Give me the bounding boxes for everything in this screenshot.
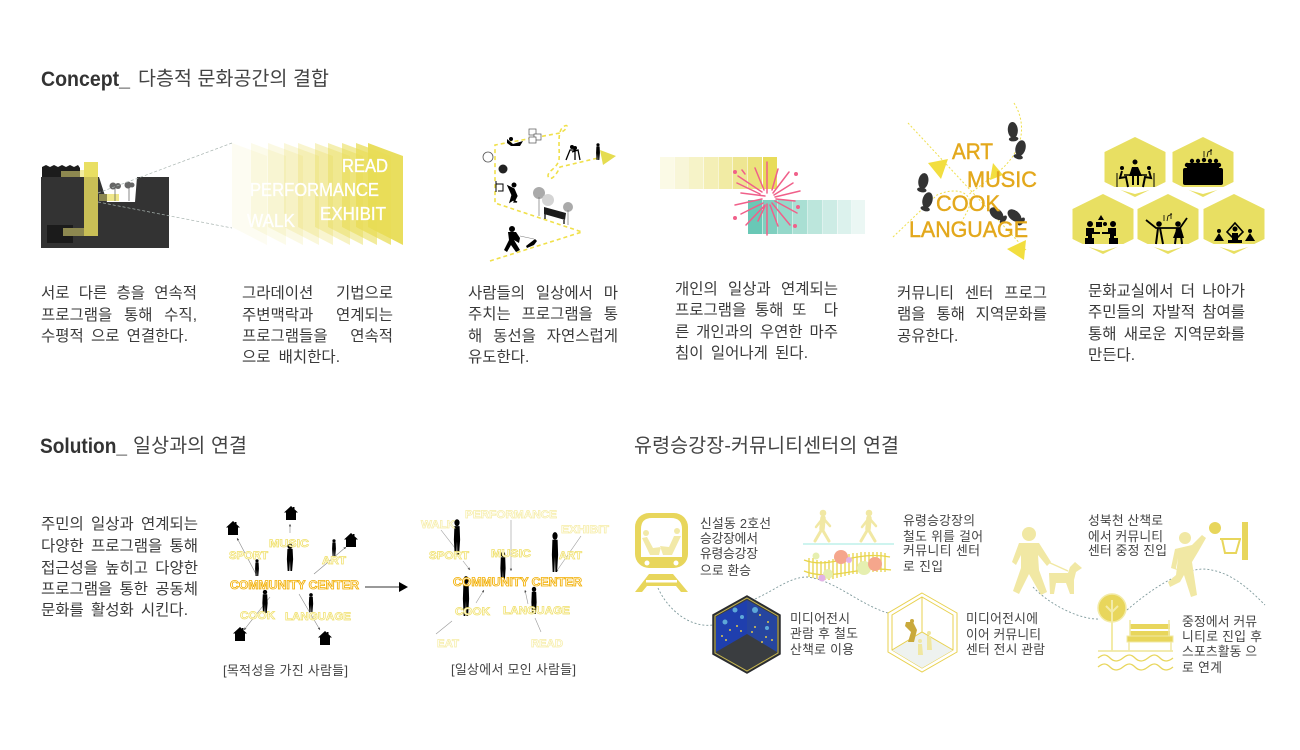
gradient panels: programs: PERFORMANCE	[250, 179, 379, 200]
text: solution: 다양한 프로그램을 통해	[41, 537, 198, 555]
text: concept 4	[675, 280, 838, 362]
gradient panels: programs: EXHIBIT	[320, 203, 386, 224]
text: concept 4: 른 개인과의 우연한 마주	[675, 323, 838, 341]
text: station	[700, 516, 771, 578]
text: solution: 문화를 활성화 시킨다.	[41, 601, 188, 619]
diagram: everyday people: EAT	[437, 638, 459, 650]
icon: sculpture hexagon	[888, 593, 957, 672]
heading: solution	[40, 435, 247, 458]
diagram: everyday people: EXHIBIT	[561, 524, 609, 536]
text: solution: 접근성을 높히고 다양한	[41, 559, 198, 577]
text: concept 1: 프로그램을 통해 수직,	[41, 306, 197, 324]
diagram: purposeful people: COMMUNITY CENTER	[230, 580, 360, 592]
text: solution: 주민의 일상과 연계되는	[41, 515, 198, 533]
text: bridge: 철도 위를 걸어	[903, 529, 983, 544]
text: concept 6: 문화교실에서 더 나아가	[1088, 282, 1245, 300]
text: concept 5	[897, 284, 1047, 345]
text: concept 6: 주민들의 자발적 참여를	[1088, 303, 1245, 321]
text: exhibition: 센터 전시 관람	[966, 642, 1045, 657]
diagram: everyday people: PERFORMANCE	[465, 509, 557, 521]
icon: table group	[1117, 160, 1154, 187]
heading: solution: 일상과의 연결	[133, 435, 247, 457]
text: media: 관람 후 철도	[790, 626, 858, 641]
diagram: everyday people	[421, 509, 609, 650]
text: bridge	[903, 513, 983, 574]
text: bridge: 커뮤니티 센터	[903, 543, 980, 558]
text: concept 3: 주치는 프로그램을 통	[468, 305, 618, 323]
diagram: purposeful people: LANGUAGE	[285, 611, 351, 623]
text: exhibition: 미디어전시에	[966, 611, 1038, 626]
diagram: everyday people: WALK	[421, 519, 455, 531]
text: concept 5: 공유한다.	[897, 327, 958, 345]
text: exhibition	[966, 611, 1045, 657]
text: concept 2: 주변맥락과 연계되는	[242, 306, 393, 324]
caption: everyday people: [일상에서 모인 사람들]	[451, 662, 576, 677]
gradient panels: programs: READ	[342, 155, 388, 176]
text: station: 신설동 2호선	[700, 516, 771, 531]
text: concept 5: 램을 통해 지역문화를	[897, 305, 1047, 323]
text: stream walk: 에서 커뮤니티	[1088, 529, 1163, 544]
gradient panels: programs	[232, 143, 403, 245]
text: media: 산책로 이용	[790, 642, 854, 657]
diagram: everyday people: LANGUAGE	[503, 605, 570, 617]
diagram: purposeful people: COOK	[240, 610, 275, 622]
text: exhibition: 이어 커뮤니티	[966, 627, 1041, 642]
text: media	[790, 611, 858, 657]
diagram: purposeful people: ART	[322, 555, 346, 567]
text: concept 2: 프로그램들을 연속적	[242, 327, 393, 345]
diagram: everyday people: COOK	[455, 606, 490, 618]
text: concept 3: 사람들의 일상에서 마	[468, 284, 618, 302]
text: concept 4: 침이 일어나게 된다.	[675, 344, 808, 362]
colour blocks with burst	[660, 157, 865, 235]
text: concept 2: 그라데이션 기법으로	[242, 284, 393, 302]
text: concept 4: 프로그램을 통해 또 다	[675, 301, 838, 319]
heading: concept: 다층적 문화공간의 결합	[138, 68, 329, 90]
text: concept 1: 서로 다른 층을 연속적	[41, 284, 197, 302]
program words with footprints: MUSIC	[967, 167, 1037, 192]
icon: walker with dog	[1012, 527, 1082, 595]
icon: choir	[1183, 158, 1223, 185]
text: solution: 프로그램을 통한 공동체	[41, 580, 198, 598]
heading: concept: Concept_	[41, 68, 130, 91]
text: concept 5: 커뮤니티 센터 프로그	[897, 284, 1047, 302]
text: concept 3	[468, 284, 618, 366]
text: concept 6: 통해 새로운 지역문화를	[1088, 325, 1245, 343]
icon: dancers	[1146, 213, 1187, 244]
text: concept 3: 유도한다.	[468, 348, 529, 366]
text: courtyard: 스포츠활동 으	[1182, 644, 1257, 659]
text: stream walk: 센터 중정 진입	[1088, 543, 1167, 558]
diagram: purposeful people	[226, 506, 360, 645]
diagram: everyday people: COMMUNITY CENTER	[453, 577, 583, 589]
program words with footprints: COOK	[936, 191, 1000, 216]
hexagon activity icons	[1072, 137, 1264, 254]
diagram: everyday people: SPORT	[429, 550, 469, 562]
icon: walkers on rail bridge	[803, 510, 894, 582]
text: stream walk: 성북천 산책로	[1088, 513, 1163, 528]
arrow: transition	[365, 582, 408, 592]
text: courtyard: 니티로 진입 후	[1182, 629, 1262, 644]
dashed route with people	[483, 125, 616, 261]
diagram: everyday people: MUSIC	[491, 548, 531, 560]
text: concept 1: 수평적 으로 연결한다.	[41, 327, 188, 345]
text: concept 2	[242, 284, 393, 366]
diagram: purposeful people: SPORT	[229, 550, 268, 562]
icon: blocks	[1085, 215, 1118, 244]
section diagram: layered building	[41, 143, 232, 248]
diagram: purposeful people: MUSIC	[269, 538, 309, 550]
icon: media hexagon	[713, 596, 780, 673]
text: bridge: 유령승강장의	[903, 513, 975, 528]
gradient panels: programs: WALK	[247, 210, 296, 231]
heading: concept	[41, 68, 329, 91]
icon: tree and bench	[1098, 594, 1173, 670]
text: concept 1	[41, 284, 197, 345]
text: stream walk	[1088, 513, 1167, 558]
icon: yoga	[1214, 223, 1255, 243]
text: courtyard: 중정에서 커뮤	[1182, 614, 1257, 629]
program words with footprints	[893, 103, 1037, 260]
heading: transfer link: 유령승강장-커뮤니티센터의 연결	[634, 435, 899, 457]
text: station: 으로 환승	[700, 563, 751, 578]
icon: basketball player	[1168, 522, 1248, 597]
text: station: 유령승강장	[700, 546, 758, 561]
text: solution	[41, 515, 198, 619]
diagram: everyday people: READ	[531, 638, 563, 650]
heading: solution: Solution_	[40, 435, 127, 458]
diagram: everyday people: ART	[559, 550, 582, 562]
program words with footprints: LANGUAGE	[909, 217, 1028, 242]
icon: train	[635, 513, 688, 592]
text: concept 6: 만든다.	[1088, 346, 1135, 364]
text: media: 미디어전시	[790, 611, 850, 626]
text: bridge: 로 진입	[903, 559, 943, 574]
text: concept 2: 으로 배치한다.	[242, 348, 340, 366]
dotted route	[658, 569, 1265, 625]
text: station: 승강장에서	[700, 531, 758, 546]
caption: purposeful people: [목적성을 가진 사람들]	[223, 663, 348, 678]
text: concept 6	[1088, 282, 1245, 364]
text: concept 3: 해 동선을 자연스럽게	[468, 327, 618, 345]
text: concept 4: 개인의 일상과 연계되는	[675, 280, 838, 298]
text: courtyard: 로 연계	[1182, 660, 1222, 675]
text: courtyard	[1182, 614, 1262, 675]
program words with footprints: ART	[952, 139, 993, 164]
